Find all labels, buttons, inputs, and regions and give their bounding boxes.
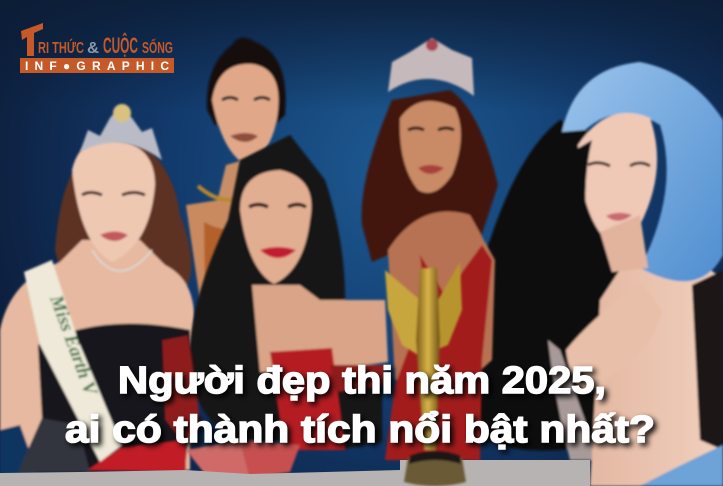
logo: INF●GRAPHIC (25, 59, 169, 73)
woman: crown, red dress (362, 90, 498, 460)
logo: & (87, 40, 99, 57)
title (65, 360, 655, 451)
title: ai có thành tích nổi bật nhất? (65, 409, 655, 451)
woman: centre, red gown and long black hair (162, 135, 388, 478)
trophy (385, 262, 466, 486)
table surface (0, 460, 590, 486)
title shadow: Người đẹp thi năm 2025, (121, 363, 609, 405)
woman: top centre, orange dress (186, 38, 300, 300)
woman: right, blue scarf (468, 62, 723, 486)
logo: SỐNG (142, 37, 173, 57)
title shadow (68, 363, 658, 454)
logo (20, 23, 174, 73)
logo: CUỘC (103, 33, 138, 58)
icon: crown left (80, 104, 162, 160)
icon: crown centre right (388, 38, 474, 96)
logo: RI THỨC (38, 38, 84, 57)
title: Người đẹp thi năm 2025, (118, 360, 606, 402)
woman: left, Miss Earth (0, 104, 194, 486)
woman: left, Miss Earth: Miss Earth V (45, 292, 101, 399)
title shadow: ai có thành tích nổi bật nhất? (68, 412, 658, 454)
